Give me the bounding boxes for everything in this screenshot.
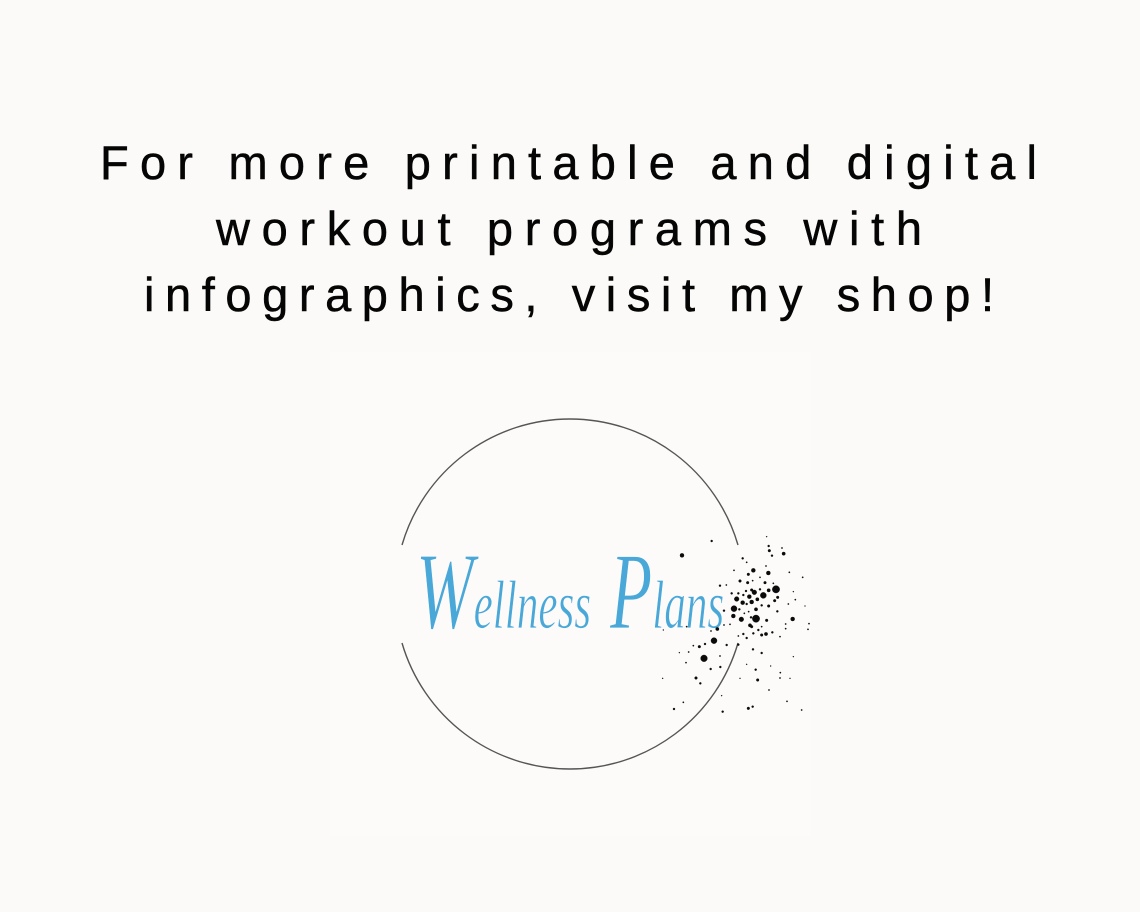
panel: logo background	[330, 352, 811, 836]
heading: workout programs with	[215, 202, 922, 255]
logo script wordmark	[416, 530, 724, 652]
logo script wordmark: Plans	[609, 530, 724, 652]
ink splatter	[662, 536, 810, 713]
heading	[100, 136, 1037, 321]
logo: Wellness Plans	[402, 419, 810, 769]
heading: infographics, visit my shop!	[144, 268, 994, 321]
heading: For more printable and digital	[100, 136, 1037, 189]
logo script wordmark: Wellness	[416, 530, 591, 652]
logo circle outline	[402, 419, 738, 769]
